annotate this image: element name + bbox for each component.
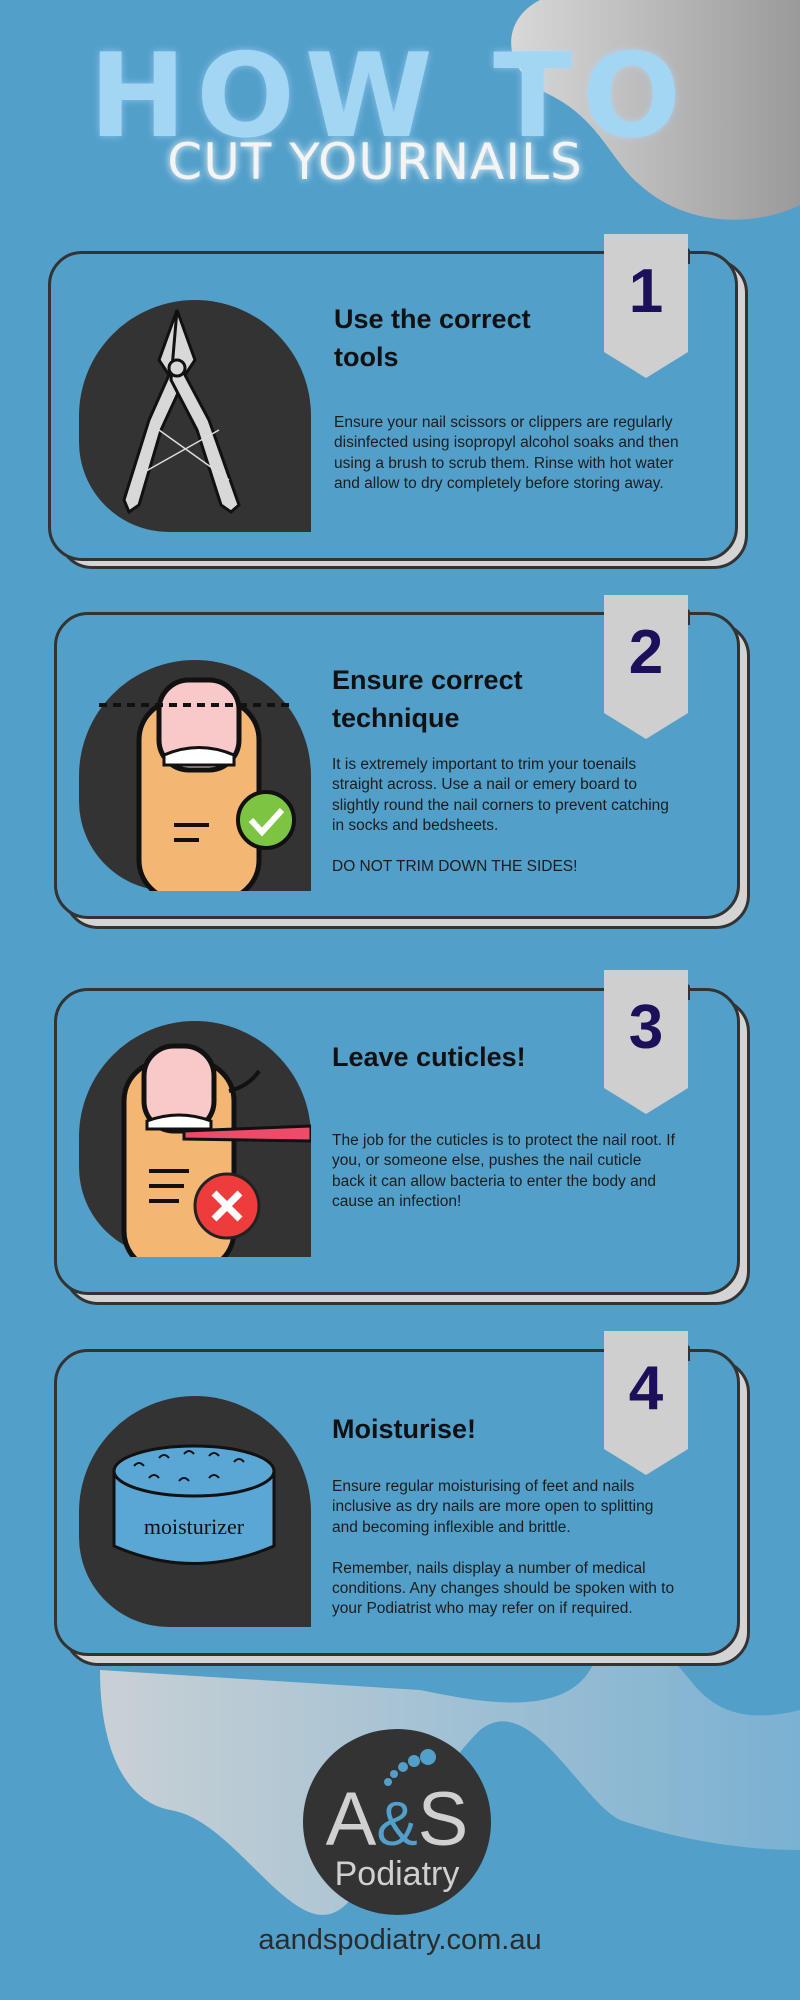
heading: [334, 304, 531, 372]
badge 2: 2: [629, 618, 663, 687]
heading: technique: [332, 703, 460, 733]
title: CUT YOURNAILS: [167, 133, 583, 191]
panel: step 3: [54, 970, 750, 1305]
text: Ensure your nail scissors or clippers are regularly disinfected using isopropyl alcohol soaks and then using a brush to scrub them. Rinse with hot water and allow to dry completely before storing away.: [334, 414, 679, 492]
text: DO NOT TRIM DOWN THE SIDES!: [332, 858, 577, 875]
heading: Use the correct: [334, 304, 531, 334]
icon: finger with cross: [79, 1021, 311, 1257]
heading: Leave cuticles!: [332, 1042, 526, 1072]
text: It is extremely important to trim your toenails straight across. Use a nail or emery board to slightly round the nail corners to prevent catching in socks and bedsheets.: [332, 756, 669, 834]
panel: step 1: [48, 234, 748, 569]
text: Remember, nails display a number of medical conditions. Any changes should be spoken with to your Podiatrist who may refer on if required.: [332, 1560, 674, 1617]
website: aandspodiatry.com.au: [258, 1924, 542, 1956]
badge 4: 4: [629, 1354, 664, 1423]
heading: Moisturise!: [332, 1414, 476, 1444]
icon: finger with check: [79, 660, 311, 891]
heading: [332, 665, 523, 733]
panel: step 4: [54, 1331, 750, 1666]
heading: Ensure correct: [332, 665, 523, 695]
heading: tools: [334, 342, 398, 372]
text: The job for the cuticles is to protect the nail root. If you, or someone else, pushes the nail cuticle back it can allow bacteria to enter the body and cause an infection!: [332, 1132, 675, 1210]
badge 2: [604, 595, 690, 739]
badge 3: [604, 970, 690, 1114]
badge 1: [604, 234, 690, 378]
text: [332, 1478, 674, 1617]
icon: clippers: [79, 300, 311, 532]
panel: step 2: [54, 595, 750, 929]
title: HOW TO: [89, 29, 691, 164]
icon: moisturizer jar: moisturizer: [144, 1514, 245, 1539]
logo: Podiatry: [335, 1855, 459, 1893]
text: [332, 756, 669, 875]
logo: [303, 1729, 491, 1915]
badge 1: 1: [629, 257, 663, 326]
icon: moisturizer jar: [79, 1396, 311, 1627]
badge 3: 3: [629, 993, 663, 1062]
logo: A&S: [326, 1777, 468, 1862]
text: Ensure regular moisturising of feet and nails inclusive as dry nails are more open to splitting and becoming inflexible and brittle.: [332, 1478, 653, 1536]
badge 4: [604, 1331, 690, 1475]
